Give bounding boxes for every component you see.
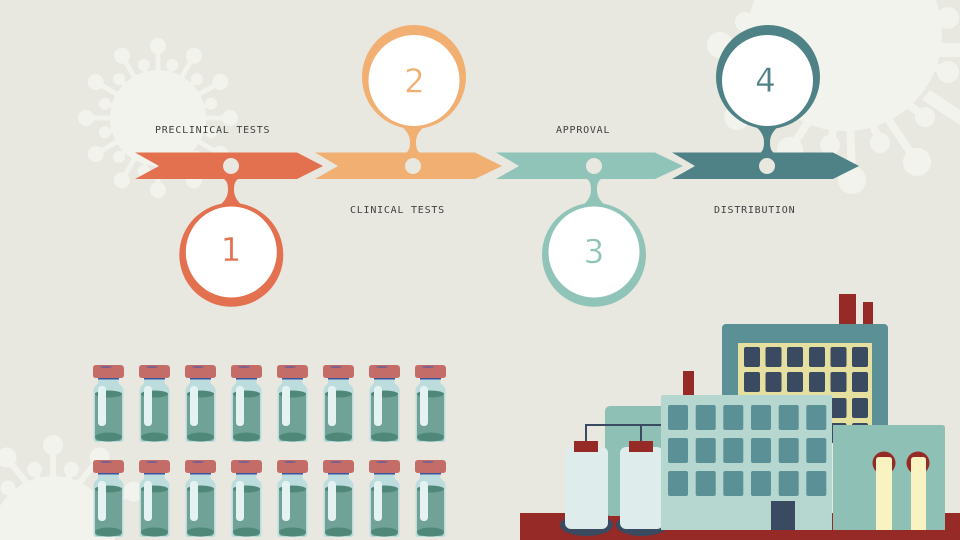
number 3: 3 bbox=[584, 233, 604, 271]
bubble 2 bbox=[362, 25, 466, 129]
marker dot 1 bbox=[223, 158, 239, 174]
step 1: preclinical tests bbox=[135, 125, 323, 307]
step 3: approval bbox=[496, 125, 683, 307]
bubble 1 bbox=[179, 203, 283, 307]
marker dot 3 bbox=[586, 158, 602, 174]
arrow 4 bbox=[672, 152, 859, 179]
arrow 3 bbox=[496, 152, 683, 179]
arrow 1 bbox=[135, 152, 323, 179]
label: clinical tests: CLINICAL TESTS bbox=[350, 205, 445, 216]
connector 2 bbox=[400, 125, 426, 154]
step 4: distribution bbox=[672, 25, 859, 216]
marker dot 4 bbox=[759, 158, 775, 174]
marker dot 2 bbox=[405, 158, 421, 174]
vial row: bottom bbox=[93, 460, 446, 537]
vial row: top bbox=[93, 365, 446, 442]
step 2: clinical tests bbox=[315, 25, 502, 216]
tank bases bbox=[560, 514, 668, 536]
right building bbox=[833, 425, 945, 530]
connector 4 bbox=[754, 125, 780, 154]
number 1: 1 bbox=[221, 231, 241, 269]
chimneys bbox=[683, 294, 873, 396]
ground bbox=[520, 513, 960, 540]
left annex bbox=[605, 406, 675, 516]
label: approval: APPROVAL bbox=[556, 125, 610, 136]
connector 1 bbox=[218, 178, 244, 207]
tank caps bbox=[574, 441, 653, 452]
front building bbox=[661, 395, 832, 530]
factory illustration bbox=[520, 294, 960, 540]
bubble 4 bbox=[716, 25, 820, 129]
number 4: 4 bbox=[755, 62, 776, 100]
back building bbox=[722, 324, 888, 443]
label: distribution: DISTRIBUTION bbox=[714, 205, 795, 216]
virus: lower left bbox=[0, 435, 144, 540]
storage tanks bbox=[565, 447, 663, 529]
number 2: 2 bbox=[404, 62, 425, 100]
virus: upper left bbox=[78, 38, 238, 198]
arrow 2 bbox=[315, 152, 502, 179]
bubble 3 bbox=[542, 203, 646, 307]
pipes bbox=[586, 425, 661, 442]
connector 3 bbox=[581, 178, 607, 207]
label: preclinical tests: PRECLINICAL TESTS bbox=[155, 125, 270, 136]
virus: upper right bbox=[707, 0, 960, 194]
